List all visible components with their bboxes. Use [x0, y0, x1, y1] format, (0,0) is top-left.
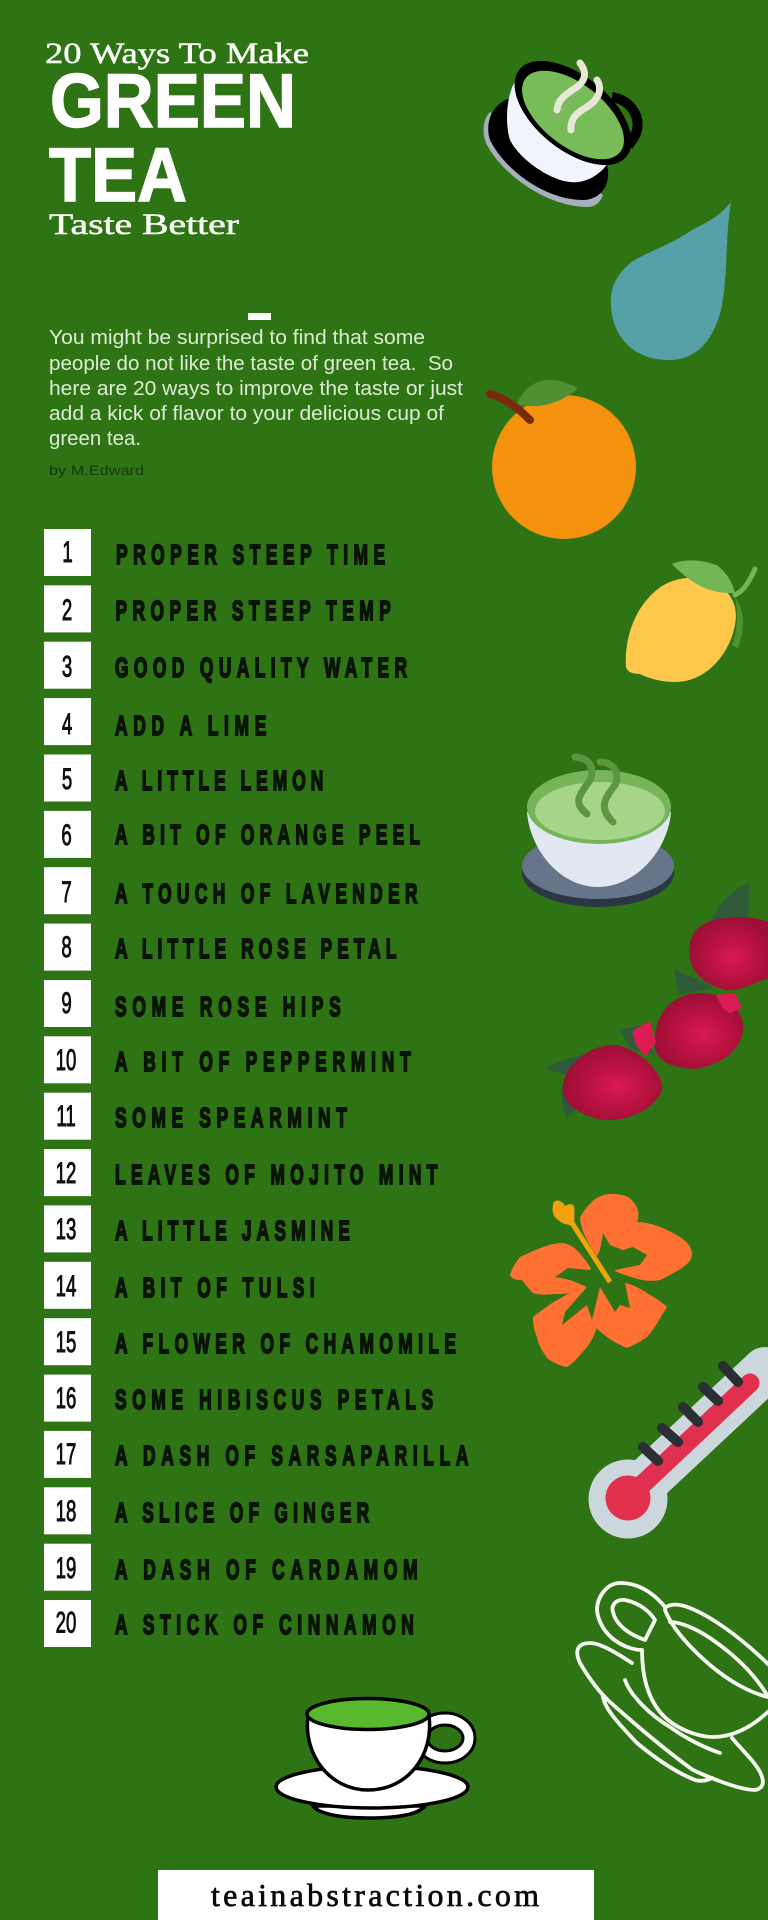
item 4	[44, 698, 266, 745]
item 3: GOOD QUALITY WATER	[115, 652, 407, 683]
item 6	[44, 811, 420, 858]
intro paragraph	[49, 326, 463, 450]
icon: outlined cup and saucer	[577, 1583, 768, 1790]
item 7	[44, 867, 418, 914]
item 15: A FLOWER OF CHAMOMILE	[115, 1328, 456, 1359]
item 14: 14	[56, 1270, 76, 1303]
icon: hibiscus flower	[510, 1194, 692, 1367]
item 15: 15	[56, 1326, 76, 1359]
item 8: A LITTLE ROSE PETAL	[115, 933, 396, 964]
item 9: SOME ROSE HIPS	[115, 991, 341, 1022]
item 11: 11	[56, 1100, 76, 1133]
item 7: 7	[61, 876, 72, 909]
item 12: 12	[56, 1157, 76, 1190]
item 15	[44, 1318, 456, 1365]
item 10: A BIT OF PEPPERMINT	[115, 1046, 411, 1077]
item 5	[44, 754, 323, 802]
title	[45, 37, 309, 241]
item 2: PROPER STEEP TEMP	[116, 595, 391, 626]
item 19: A DASH OF CARDAMOM	[115, 1554, 418, 1585]
title: Taste Better	[49, 208, 239, 241]
item 8: 8	[61, 931, 72, 964]
website banner	[158, 1870, 594, 1920]
item 1	[44, 529, 385, 576]
intro paragraph: green tea.	[49, 427, 141, 450]
item 17: 17	[56, 1438, 76, 1471]
item 6: 6	[61, 819, 72, 852]
intro paragraph: here are 20 ways to improve the taste or just	[49, 377, 463, 400]
item 13	[44, 1205, 350, 1252]
icon: white cup with green tea on saucer	[276, 1698, 469, 1818]
item 7: A TOUCH OF LAVENDER	[115, 878, 418, 909]
item 12: LEAVES OF MOJITO MINT	[115, 1159, 437, 1190]
item 20: A STICK OF CINNAMON	[115, 1609, 414, 1640]
small white dash	[248, 313, 271, 320]
icon: matcha bowl	[522, 757, 674, 907]
item 13: 13	[56, 1213, 76, 1246]
item 18: 18	[56, 1495, 76, 1528]
icon: roses	[545, 883, 768, 1120]
icon: orange	[490, 380, 636, 539]
title: 20 Ways To Make	[45, 37, 309, 70]
item 17: A DASH OF SARSAPARILLA	[115, 1440, 469, 1471]
website banner: teainabstraction.com	[211, 1877, 539, 1913]
item 3: 3	[62, 650, 72, 684]
item 10: 10	[56, 1044, 76, 1077]
icon: thermometer	[588, 1366, 765, 1538]
item 5: 5	[62, 763, 72, 796]
item 10	[44, 1036, 411, 1083]
icon: lemon	[626, 560, 755, 682]
item 2: 2	[62, 594, 72, 627]
item 18	[44, 1487, 369, 1534]
item 20: 20	[56, 1606, 76, 1640]
item 2	[44, 585, 391, 632]
title: TEA	[49, 133, 187, 218]
item 4: 4	[62, 708, 72, 741]
intro paragraph: You might be surprised to find that some	[49, 326, 425, 349]
item 16: SOME HIBISCUS PETALS	[115, 1384, 433, 1415]
item 17	[44, 1431, 469, 1478]
item 14: A BIT OF TULSI	[115, 1272, 315, 1303]
list of 20 ways	[44, 529, 469, 1647]
intro paragraph: people do not like the taste of green tea. So	[49, 352, 453, 375]
intro paragraph: add a kick of flavor to your delicious cup of	[49, 402, 444, 425]
item 13: A LITTLE JASMINE	[115, 1215, 350, 1246]
item 11	[44, 1093, 347, 1140]
item 8	[44, 924, 396, 971]
item 4: ADD A LIME	[115, 710, 266, 741]
item 16: 16	[56, 1382, 76, 1415]
item 16	[44, 1375, 433, 1422]
item 19: 19	[56, 1552, 76, 1585]
item 20	[44, 1600, 414, 1647]
item 11: SOME SPEARMINT	[115, 1102, 347, 1133]
item 1: 1	[62, 536, 73, 569]
item 5: A LITTLE LEMON	[115, 765, 323, 796]
item 14	[44, 1262, 315, 1309]
item 12	[44, 1149, 437, 1196]
item 19	[44, 1544, 418, 1591]
item 18: A SLICE OF GINGER	[115, 1497, 369, 1528]
item 6: A BIT OF ORANGE PEEL	[115, 819, 420, 850]
item 3	[44, 642, 407, 689]
item 1: PROPER STEEP TIME	[116, 539, 385, 570]
item 9: 9	[61, 987, 72, 1020]
icon: tilted teacup	[484, 41, 650, 207]
item 9	[44, 980, 341, 1027]
icon: water drop	[611, 202, 731, 360]
byline: by M.Edward	[49, 462, 144, 478]
title: GREEN	[50, 59, 296, 144]
